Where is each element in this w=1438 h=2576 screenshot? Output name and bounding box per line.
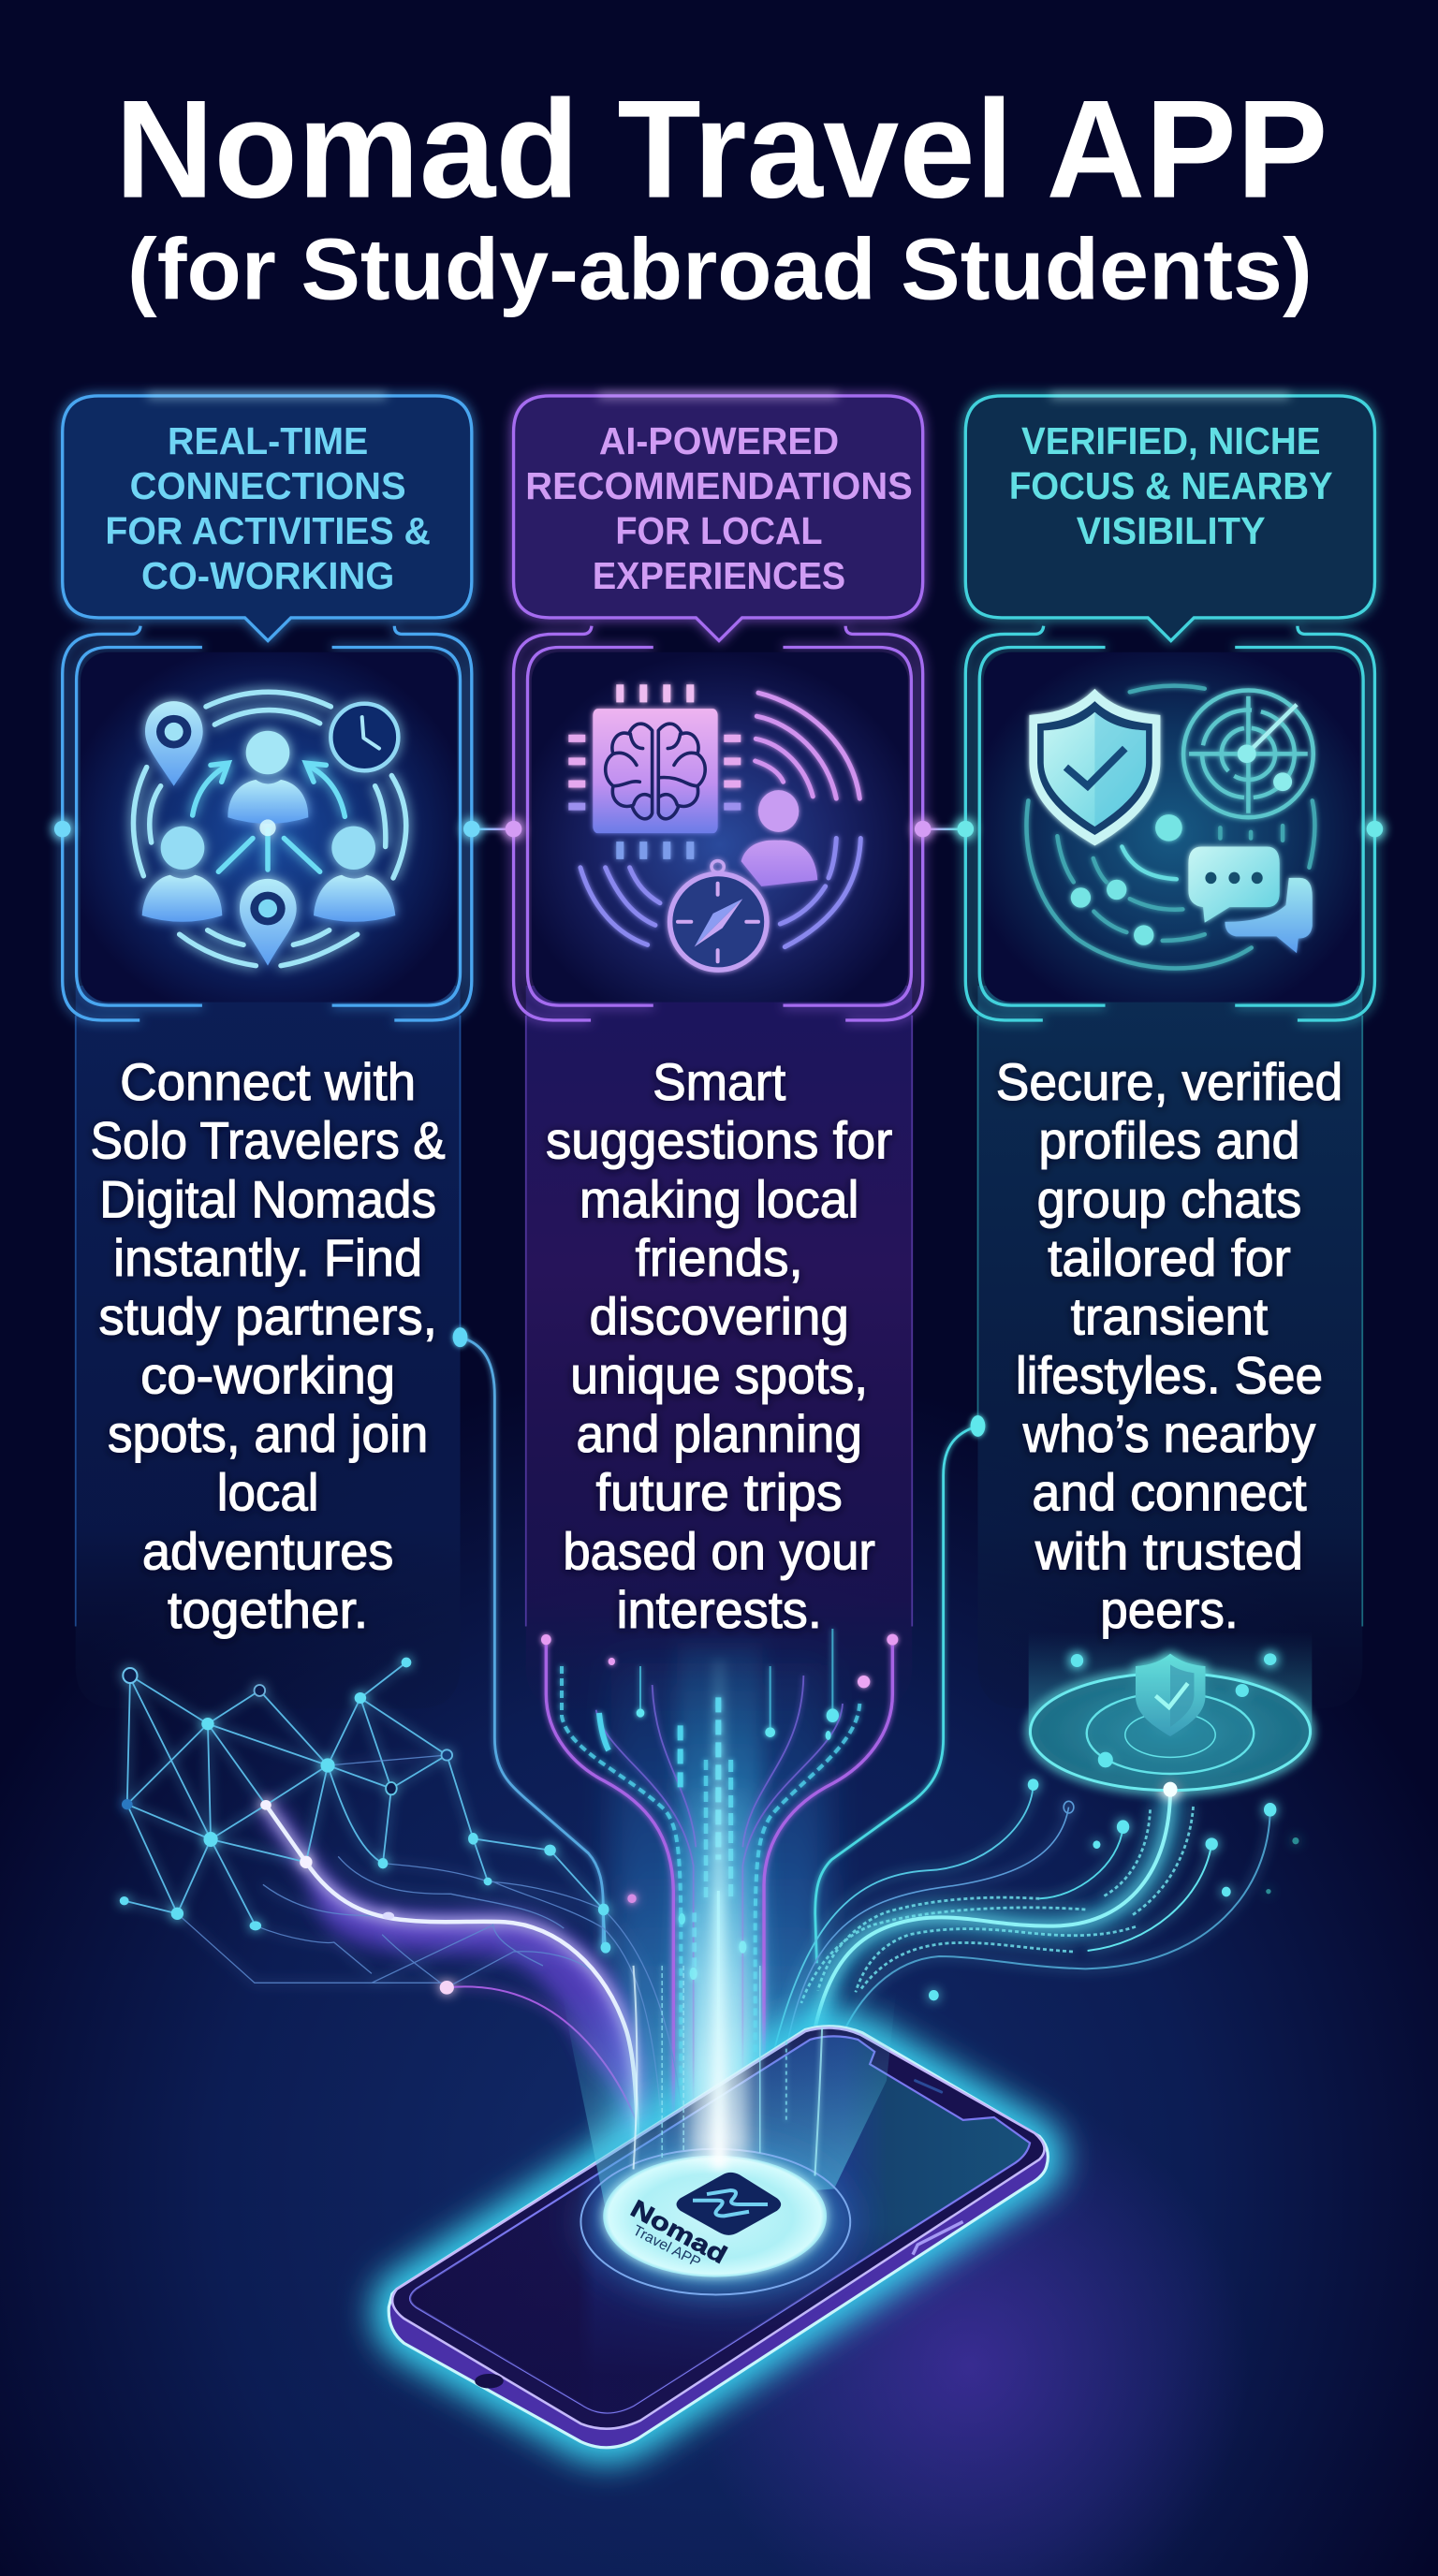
flow nodes <box>929 1778 1299 2000</box>
heading: real-time connections: REAL-TIME <box>168 419 368 462</box>
body text column 3: Secure, verified <box>996 1053 1343 1111</box>
body text column 2: suggestions for <box>546 1112 892 1170</box>
heading: real-time connections <box>105 419 431 597</box>
stream nodes <box>541 1634 898 1980</box>
side button <box>913 2222 963 2255</box>
phone glow <box>389 2027 1048 2448</box>
body text column 3: profiles and <box>1038 1112 1300 1170</box>
body text column 1: study partners, <box>98 1288 437 1346</box>
phone top face <box>392 2027 1045 2429</box>
phone light cone <box>562 1992 896 2205</box>
icon: location pin top <box>145 701 203 786</box>
app subtitle: Travel APP <box>630 2223 703 2271</box>
connector lines between columns <box>472 828 964 830</box>
body text column 1: local <box>217 1464 319 1522</box>
disc rings <box>1087 1692 1254 1774</box>
body text column 2: future trips <box>596 1464 843 1522</box>
body text column 1: Solo Travelers & <box>91 1112 446 1170</box>
white beam <box>690 1660 749 2169</box>
body text column 2: Smart <box>653 1053 785 1111</box>
panel: text column backgrounds <box>76 986 1362 1708</box>
body text column 1: together. <box>168 1581 368 1639</box>
body text column 2: interests. <box>616 1581 822 1639</box>
icon: location pin bottom <box>240 879 297 966</box>
icon: shield, radar and chat <box>1027 686 1314 968</box>
title <box>115 71 1328 317</box>
body text column 3 <box>996 1053 1343 1639</box>
body text column 2: unique spots, <box>570 1346 868 1404</box>
heading: AI-powered recommendations: AI-POWERED <box>599 419 839 462</box>
body text column 1: co-working <box>140 1346 395 1404</box>
bubble and frame strokes <box>63 396 472 1020</box>
phone <box>389 2027 1048 2448</box>
left network graph <box>120 1658 681 2146</box>
subtitle line: for Study-abroad Students: (for Study-abroad Students) <box>127 220 1313 317</box>
phone screen <box>410 2036 1030 2412</box>
connector line: column 1 to phone <box>453 1327 603 1947</box>
central data stream <box>541 1629 898 2185</box>
node right <box>1367 821 1383 837</box>
icon: people network <box>133 692 406 966</box>
node right <box>915 821 931 837</box>
left flow: purple band glow <box>266 1805 638 2146</box>
body text column 3: with trusted <box>1034 1522 1303 1580</box>
person <box>741 841 817 886</box>
icon: person center <box>227 780 308 824</box>
secondary stream curves <box>596 1676 843 2125</box>
body text column 2: discovering <box>589 1288 849 1346</box>
body text column 3: who’s nearby <box>1022 1405 1316 1463</box>
dashed data curves <box>801 1807 1194 2003</box>
icon: chat bubbles <box>1225 878 1313 953</box>
logo tile <box>677 2173 781 2235</box>
heading: AI-powered recommendations: FOR LOCAL <box>615 509 823 552</box>
bubble and frame strokes <box>965 396 1374 1020</box>
body text column 2: and planning <box>576 1405 862 1463</box>
small shield <box>1136 1654 1205 1736</box>
app disc <box>580 2149 850 2294</box>
app name: Nomad <box>626 2194 732 2269</box>
right main curve glow <box>801 1790 1170 2146</box>
disc dots <box>1071 1653 1276 1767</box>
heading: verified niche focus: VERIFIED, NICHE <box>1021 419 1320 462</box>
column 3 header and icon frame <box>958 394 1383 1020</box>
body text column 3: peers. <box>1100 1581 1239 1639</box>
dashed data lines <box>562 1629 859 2125</box>
icon: radar <box>1183 690 1313 817</box>
icon: person left <box>142 875 222 922</box>
column 1 header and icon frame <box>54 394 480 1020</box>
charge port <box>475 2374 504 2388</box>
heading: verified niche focus: VISIBILITY <box>1077 509 1266 552</box>
glowing disc with shield <box>1030 1653 1311 1797</box>
main white curve <box>266 1805 638 2146</box>
heading: verified niche focus <box>1009 419 1333 552</box>
heading: real-time connections: FOR ACTIVITIES & <box>105 509 431 552</box>
thin curves <box>759 1785 1034 2115</box>
body text column 3: and connect <box>1032 1464 1307 1522</box>
body text column 3: group chats <box>1037 1170 1301 1228</box>
connector line: column 3 to phone <box>815 1415 985 1963</box>
body text column 1: spots, and join <box>108 1405 428 1463</box>
body text column 1: Digital Nomads <box>99 1170 436 1228</box>
right flow lines <box>759 1778 1299 2146</box>
app logo <box>677 2173 781 2235</box>
compass <box>670 861 767 970</box>
right disc light cone <box>1029 1632 1312 1734</box>
body text column 2: based on your <box>563 1522 875 1580</box>
speaker <box>916 2081 942 2092</box>
title line: Nomad Travel APP: Nomad Travel APP <box>115 71 1328 227</box>
arcs and dots <box>1027 686 1314 968</box>
body text column 3: transient <box>1071 1288 1268 1346</box>
outer ring <box>580 2149 850 2294</box>
node right <box>463 821 480 837</box>
phone body side <box>389 2027 1048 2448</box>
heading: verified niche focus: FOCUS & NEARBY <box>1009 464 1333 507</box>
body text column 1: Connect with <box>120 1053 416 1111</box>
body text column 3: tailored for <box>1048 1229 1291 1287</box>
body text column 1 <box>91 1053 446 1639</box>
node left <box>958 821 974 837</box>
icon: shield <box>1029 689 1160 846</box>
purple stream curves <box>546 1640 892 2125</box>
central stream glow <box>611 1660 829 2185</box>
screen lower shade <box>410 2036 1030 2412</box>
disc ellipse <box>1030 1673 1311 1791</box>
heading: real-time connections: CONNECTIONS <box>130 464 406 507</box>
body text column 1: adventures <box>142 1522 393 1580</box>
heading: AI-powered recommendations: EXPERIENCES <box>593 554 845 597</box>
chip pins <box>568 684 741 859</box>
pink line <box>447 1986 639 2128</box>
chip <box>593 709 718 833</box>
body text column 2: making local <box>580 1170 858 1228</box>
brain outline <box>606 724 705 819</box>
logo wave <box>693 2190 768 2216</box>
network nodes <box>120 1658 637 1995</box>
inner disc <box>603 2156 827 2277</box>
disc halo <box>565 2132 868 2310</box>
light beam <box>677 1643 763 2185</box>
body text column 1: instantly. Find <box>113 1229 422 1287</box>
node left <box>54 821 70 837</box>
body text column 2: friends, <box>636 1229 803 1287</box>
streams over phone <box>634 1966 822 2175</box>
icon: clock <box>330 704 398 770</box>
icon: AI brain chip, person and compass <box>568 684 860 970</box>
body text column 2 <box>546 1053 892 1639</box>
heading: real-time connections: CO-WORKING <box>141 554 394 597</box>
node left <box>506 821 521 837</box>
network edges <box>125 1662 606 1948</box>
signal arcs <box>580 693 860 947</box>
icon: person right <box>314 875 395 922</box>
body text column 3: lifestyles. See <box>1016 1346 1323 1404</box>
main cyan curve <box>801 1790 1170 2146</box>
bubble and frame strokes <box>514 396 923 1020</box>
column 2 header and icon frame <box>506 394 931 1020</box>
heading: AI-powered recommendations <box>525 419 913 597</box>
heading: AI-powered recommendations: RECOMMENDATIONS <box>525 464 913 507</box>
